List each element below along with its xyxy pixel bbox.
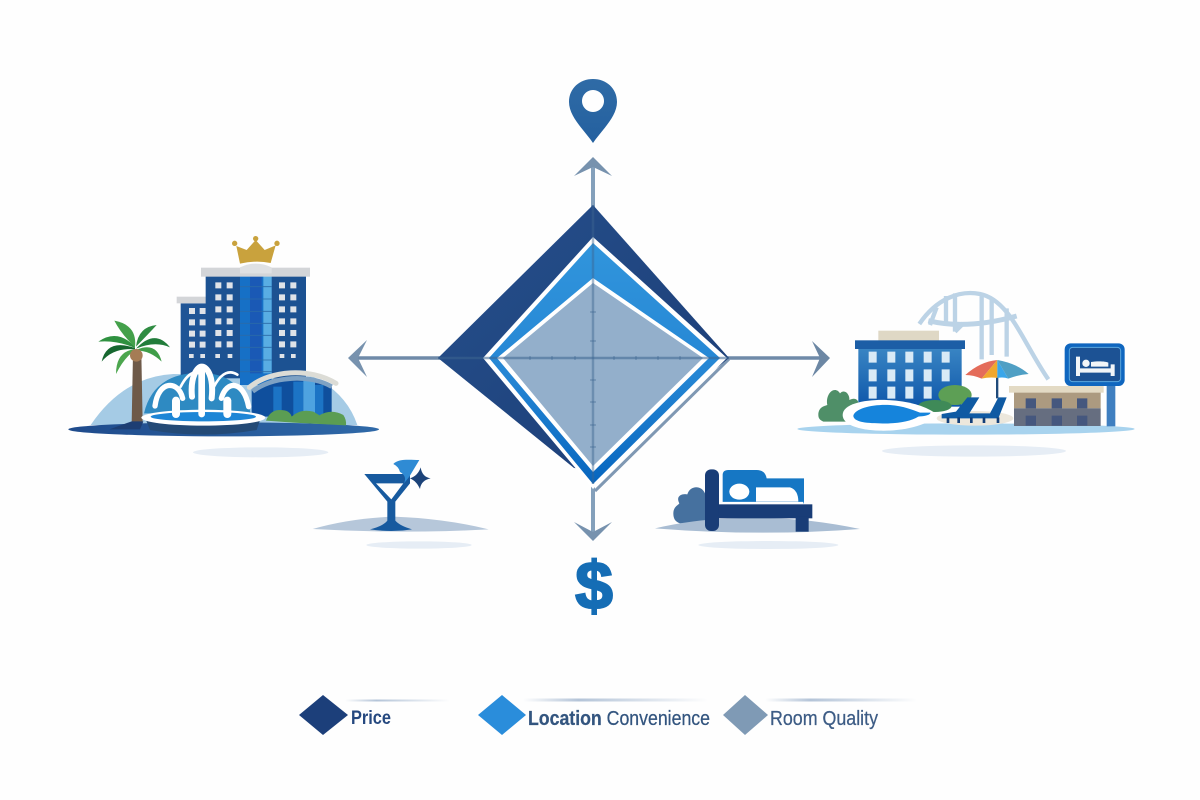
swimming pool (843, 400, 936, 431)
blanket (723, 470, 804, 503)
pillow (729, 484, 749, 500)
sand patio (937, 411, 1013, 426)
icon: location pin (569, 79, 617, 143)
motel building (1009, 386, 1104, 426)
low glass pavilion (249, 373, 336, 417)
sparkle (410, 467, 431, 489)
icon: dollar sign: $ (575, 548, 613, 624)
pale hill (91, 374, 357, 425)
bed frame (705, 469, 812, 532)
bushes (266, 410, 346, 425)
series: location convenience (489, 243, 720, 484)
vertical axis (591, 165, 595, 535)
left tower (177, 297, 209, 378)
legend rule: room quality (765, 698, 917, 702)
scene: budget resort (797, 293, 1135, 457)
glass (364, 474, 412, 531)
floor shadow (366, 541, 472, 549)
arrowhead: left (348, 340, 367, 377)
mound (313, 517, 489, 532)
outer line to bottom (595, 359, 729, 491)
lounge chairs (942, 397, 1007, 423)
ground water (797, 423, 1135, 435)
crown (232, 236, 280, 264)
garnish (393, 460, 419, 483)
horizontal axis (355, 356, 823, 360)
blue hotel (855, 331, 965, 407)
fountain (141, 367, 265, 435)
arrowhead: down (574, 522, 612, 541)
ground (68, 422, 379, 436)
legend swatch: room quality (723, 695, 768, 735)
floor shadow (882, 445, 1066, 457)
scene: luxury hotel (68, 236, 379, 457)
legend swatch: price (299, 695, 348, 735)
legend label: location convenience: Location Convenience (528, 708, 710, 730)
floor shadow (698, 541, 838, 549)
series: room quality outline (497, 278, 709, 472)
icon: cocktail glass (313, 460, 489, 549)
arrowhead: up (574, 157, 612, 176)
sun umbrella (965, 360, 1029, 398)
roller coaster (919, 293, 1048, 379)
bush (673, 487, 705, 523)
legend swatch: location convenience (478, 695, 526, 735)
floor shadow (193, 447, 328, 457)
radar chart (348, 157, 830, 541)
legend label: price: Price (351, 708, 391, 729)
legend label: room quality: Room Quality (770, 708, 878, 730)
legend rule: price (345, 700, 450, 702)
shrubs (818, 385, 972, 422)
legend (299, 695, 917, 735)
legend rule: location (523, 698, 708, 702)
mound (655, 518, 860, 533)
sign: bed icon (1065, 343, 1125, 426)
series: price (438, 205, 729, 470)
series: location convenience outline (483, 237, 727, 489)
arrowhead: right (812, 341, 830, 377)
main tower (201, 264, 310, 385)
palm tree (98, 321, 170, 429)
series: room quality (503, 283, 703, 466)
icon: bed (655, 469, 860, 549)
inner axes and ticks (438, 205, 729, 484)
